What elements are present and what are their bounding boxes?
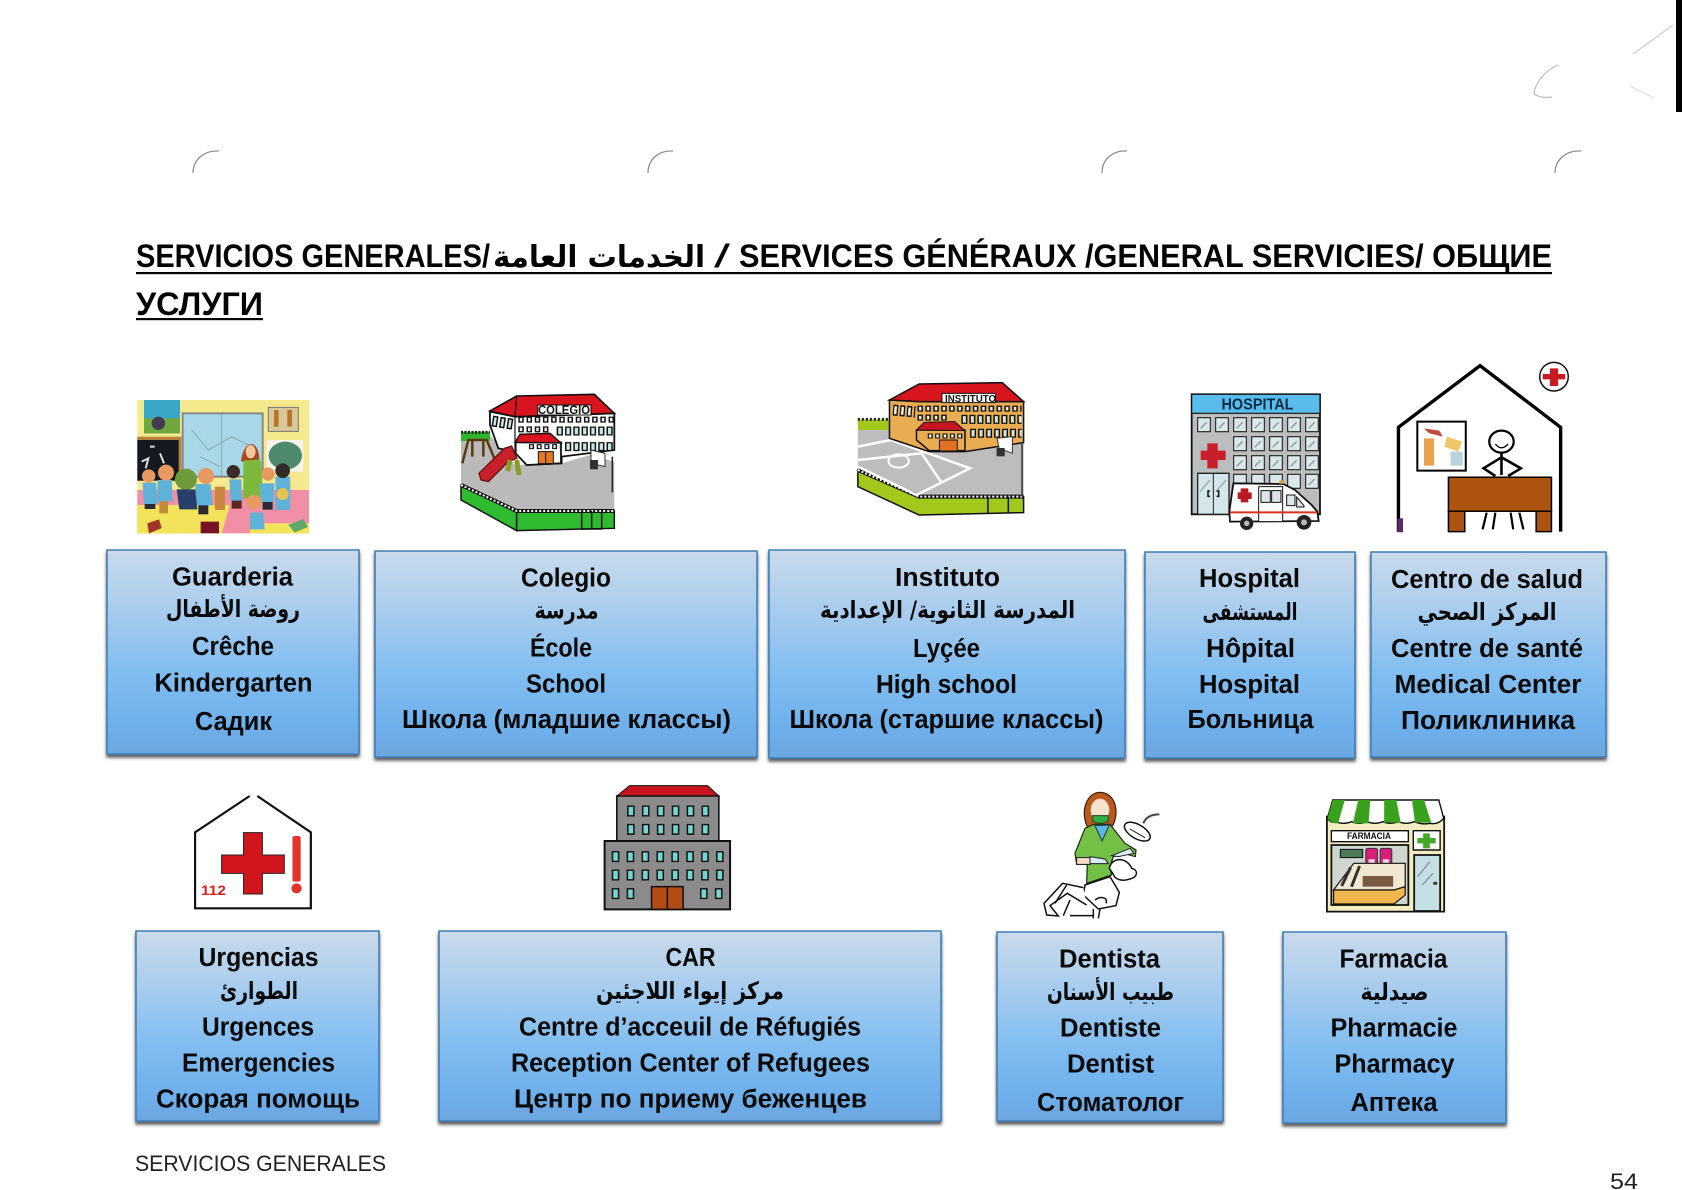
box: Guarderia: Crêche [192,633,274,661]
box: CAR: مركز إيواء اللاجئين [596,977,784,1005]
box: Centro de salud: Centro de salud [1391,566,1583,594]
box: Instituto: Instituto [895,564,1000,592]
box: Guarderia: Садик [195,708,272,736]
box: Hospital: المستشفى [1202,598,1298,626]
box: Hospital: Hospital [1199,671,1300,699]
box: CAR: Reception Center of Refugees [511,1050,870,1078]
title [136,238,1552,322]
box: Hospital: Hôpital [1206,635,1295,663]
box: Centro de salud: Medical Center [1394,671,1582,699]
box: Colegio: School [526,670,606,698]
icon: instituto building [858,383,1024,515]
box: Dentista: Dentista [1059,946,1161,974]
box: Instituto: High school [876,671,1017,699]
box: CAR [439,931,941,1121]
label: HOSPITAL: HOSPITAL [1222,396,1294,414]
box: CAR: CAR [666,944,716,972]
box: Guarderia: روضة الأطفال [166,594,300,623]
box: Farmacia: Pharmacie [1330,1014,1458,1042]
box: Centro de salud: Поликлиника [1401,707,1576,735]
icon: kindergarten classroom [137,400,309,533]
box: Guarderia [107,550,359,754]
box: Farmacia [1283,932,1506,1123]
box: Instituto: المدرسة الثانوية/ الإعدادية [820,596,1075,624]
title: الخدمات العامة [493,240,705,275]
icon: CAR building [605,786,730,909]
box: Guarderia: Guarderia [172,564,294,592]
label: FARMACIA: FARMACIA [1347,831,1391,841]
icon: centro de salud [1397,362,1568,532]
box: Dentista: Dentist [1067,1050,1154,1078]
icon: pharmacy [1327,800,1444,912]
title: / [714,238,730,274]
box: Colegio: مدرسة [534,596,598,624]
box: Farmacia: صيدلية [1360,978,1428,1006]
box: Instituto: Школа (старшие классы) [790,706,1104,734]
footer label: SERVICIOS GENERALES [135,1151,386,1176]
box: Centro de salud [1371,552,1606,757]
box: Hospital [1145,552,1355,758]
label: INSTITUTO: INSTITUTO [945,393,996,405]
icon: hospital [1192,394,1320,530]
box: Urgencias: Скорая помощь [156,1086,360,1114]
box: Urgencias: Emergencies [182,1050,335,1078]
box: Dentista: Стоматолог [1037,1089,1184,1117]
title: SERVICIOS GENERALES/ [136,238,490,274]
scan marks: punch holes [193,25,1673,173]
icon: dentist [1044,792,1159,918]
box: Hospital: Hospital [1199,565,1300,593]
box: Centro de salud: Centre de santé [1391,635,1583,663]
box: Guarderia: Kindergarten [154,670,312,698]
box: Urgencias: الطوارئ [220,977,298,1005]
label: 112: 112 [201,883,226,898]
box: Dentista [997,932,1223,1121]
title: SERVICES GÉNÉRAUX /GENERAL SERVICIES/ ОБЩИЕ [739,238,1552,274]
title: УСЛУГИ [136,286,263,322]
box: Colegio: École [530,634,592,662]
box: Farmacia: Аптека [1350,1089,1438,1117]
box: Colegio: Colegio [521,564,611,592]
box: Hospital: Больница [1188,706,1314,734]
box: Instituto [769,550,1125,758]
box: Farmacia: Pharmacy [1334,1050,1455,1078]
box: Colegio [375,551,757,757]
box: Urgencias: Urgences [202,1014,314,1042]
box: Urgencias [136,931,379,1121]
box: Instituto: Lyçée [913,635,980,663]
box: CAR: Centre d’acceuil de Réfugiés [519,1014,861,1042]
box: Dentista: Dentiste [1060,1014,1161,1042]
icon: colegio building [461,394,614,531]
icon: urgencias house [195,794,311,908]
box: Colegio: Школа (младшие классы) [402,706,731,734]
box: CAR: Центр по приему беженцев [514,1086,867,1114]
label: COLEGIO: COLEGIO [538,405,590,417]
box: Centro de salud: المركز الصحي [1418,598,1556,626]
box: Urgencias: Urgencias [198,944,318,972]
box: Dentista: طبيب الأسنان [1047,977,1174,1006]
box: Farmacia: Farmacia [1340,946,1448,974]
scan edge: black bar [1676,0,1682,112]
